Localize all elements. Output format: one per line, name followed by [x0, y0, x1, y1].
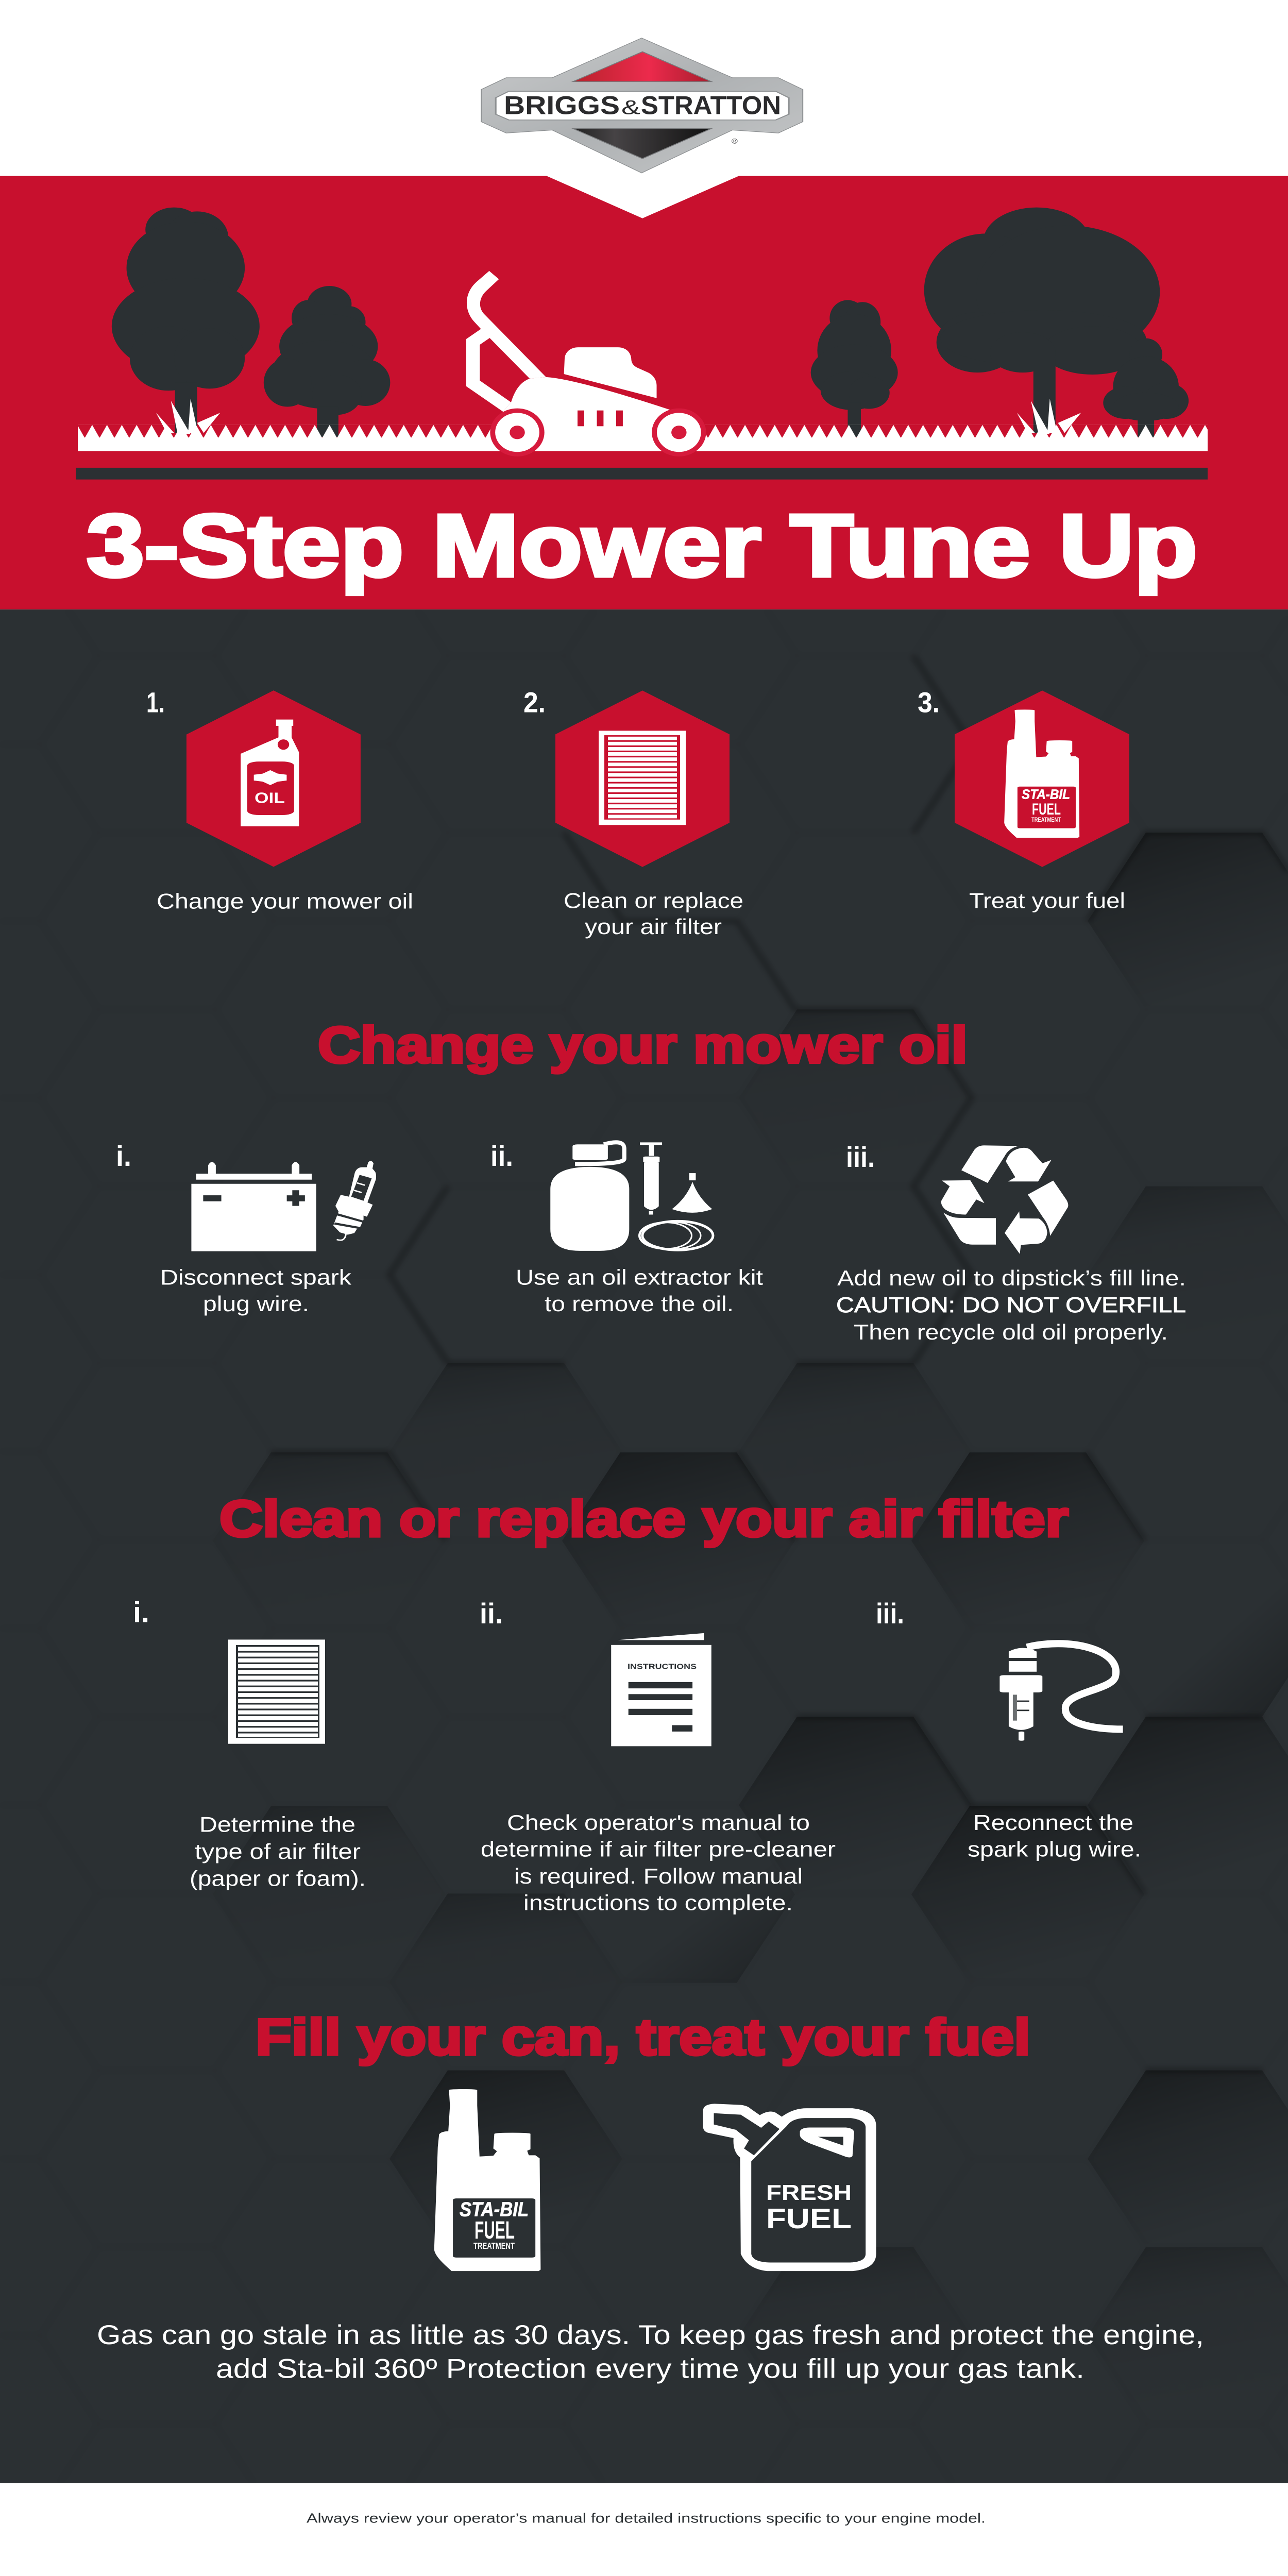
filter step i: type of air filter: [195, 1839, 361, 1863]
footer note: Always review your operator’s manual for detailed instructions specific to your engine model.: [307, 2510, 986, 2526]
title: 3-Step Mower Tune Up: [87, 496, 1197, 595]
icon: air filter: [228, 1639, 325, 1744]
filter step i: Determine the: [199, 1812, 355, 1837]
logo: Briggs & Stratton badge: ®: [732, 137, 738, 145]
step 2 overview: 2.: [523, 686, 546, 719]
filter step ii: is required. Follow manual: [514, 1864, 803, 1888]
icon: instruction manual: INSTRUCTIONS: [628, 1663, 697, 1671]
oil step ii: to remove the oil.: [545, 1292, 734, 1316]
step 3 overview: Treat your fuel: [969, 888, 1125, 913]
logo: Briggs & Stratton badge: BRIGGS: [504, 92, 620, 120]
divider bar under illustration: [76, 468, 1208, 480]
icon: battery and spark plug: [191, 1161, 376, 1251]
oil step ii: Use an oil extractor kit: [516, 1265, 764, 1290]
background: dark hexagon wall: [0, 609, 1288, 2483]
icon: Sta-Bil bottle in red hexagon: STA-BIL: [1022, 786, 1070, 802]
icon: Sta-Bil bottle: [434, 2089, 540, 2271]
filter step iii: spark plug wire.: [968, 1837, 1141, 1861]
icon: oil bottle in red hexagon: OIL: [255, 789, 285, 806]
fuel paragraph: Gas can go stale in as little as 30 days. To keep gas fresh and protect the engine,: [97, 2319, 1204, 2350]
oil step ii: [490, 1140, 764, 1316]
icon: Sta-Bil bottle: STA-BIL: [460, 2198, 529, 2221]
footer band: [0, 2483, 1288, 2576]
heading: change oil: Change your mower oil: [318, 1016, 968, 1074]
logo: Briggs & Stratton badge: [481, 38, 803, 173]
fuel paragraph: add Sta-bil 360º Protection every time you fill up your gas tank.: [216, 2353, 1084, 2384]
oil step iii: iii.: [846, 1141, 875, 1173]
fuel paragraph: [97, 2319, 1204, 2384]
icon: Sta-Bil bottle: TREATMENT: [473, 2241, 515, 2251]
step 2 overview: your air filter: [585, 914, 722, 939]
filter step i: (paper or foam).: [190, 1866, 366, 1891]
illustration: grass strip: [78, 399, 1208, 451]
illustration: trees: [112, 208, 1189, 437]
header red band with notch: [0, 176, 1288, 609]
oil step i: plug wire.: [203, 1292, 309, 1316]
icon: Sta-Bil bottle: FUEL: [474, 2216, 515, 2244]
filter step iii: iii.: [876, 1598, 904, 1630]
filter step ii: ii.: [480, 1598, 503, 1630]
step 1 overview: Change your mower oil: [157, 889, 413, 913]
icon: spark plug and wire: [999, 1643, 1123, 1741]
heading: air filter: Clean or replace your air filter: [219, 1490, 1069, 1547]
icon: fresh fuel can: FRESH: [766, 2180, 852, 2205]
icon: oil extractor kit: [550, 1142, 713, 1251]
step 2 overview: [523, 686, 743, 939]
oil step i: [116, 1140, 376, 1316]
oil step iii: CAUTION: DO NOT OVERFILL: [836, 1293, 1186, 1317]
icon: Sta-Bil bottle in red hexagon: FUEL: [1032, 800, 1061, 819]
oil step i: Disconnect spark: [160, 1265, 351, 1290]
icon: Sta-Bil bottle in red hexagon: TREATMENT: [1031, 816, 1061, 823]
filter step ii: instructions to complete.: [523, 1891, 793, 1915]
icon: instruction manual: [611, 1633, 711, 1746]
step 3 overview: 3.: [918, 686, 940, 719]
filter step iii: [876, 1598, 1141, 1861]
filter step ii: determine if air filter pre-cleaner: [481, 1837, 836, 1861]
filter step i: [133, 1596, 366, 1891]
oil step iii: Add new oil to dipstick’s fill line.: [837, 1266, 1186, 1291]
filter step iii: Reconnect the: [973, 1810, 1133, 1835]
filter step ii: Check operator's manual to: [507, 1810, 810, 1835]
oil step ii: ii.: [490, 1140, 513, 1172]
icon: air filter in red hexagon: [555, 690, 730, 867]
oil step iii: [836, 1141, 1186, 1345]
icon: Sta-Bil bottle in red hexagon: [955, 690, 1129, 867]
step 3 overview: [918, 686, 1129, 913]
icon: fresh fuel can: [703, 2104, 876, 2271]
logo: Briggs & Stratton badge: STRATTON: [641, 92, 781, 120]
oil step i: i.: [116, 1140, 131, 1172]
illustration: lawn mower: [466, 271, 706, 456]
filter step ii: [480, 1598, 836, 1915]
icon: oil bottle in red hexagon: [187, 690, 361, 867]
filter step i: i.: [133, 1596, 149, 1628]
step 1 overview: [146, 686, 413, 913]
icon: fresh fuel can: FUEL: [766, 2204, 852, 2234]
heading: fuel: Fill your can, treat your fuel: [256, 2008, 1030, 2065]
oil step iii: Then recycle old oil properly.: [854, 1320, 1168, 1345]
icon: recycle symbol: [941, 1145, 1068, 1254]
logo: Briggs & Stratton badge: &: [621, 96, 640, 118]
step 2 overview: Clean or replace: [564, 888, 743, 913]
step 1 overview: 1.: [146, 686, 165, 719]
